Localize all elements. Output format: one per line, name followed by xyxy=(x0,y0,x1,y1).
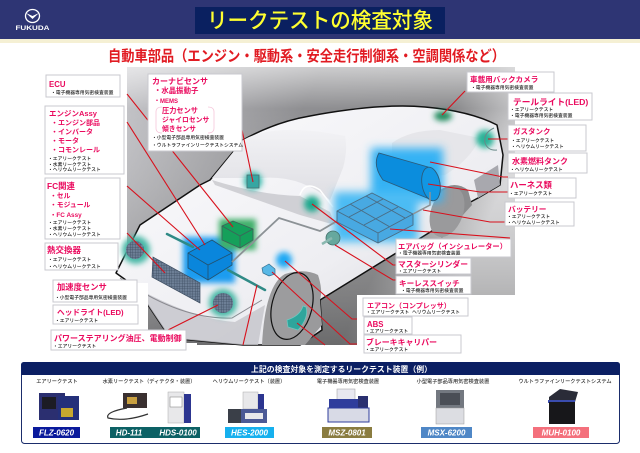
label: ハーネス類: ・エアリークテスト xyxy=(509,190,552,197)
label: 加速度センサ xyxy=(53,280,137,302)
label: エンジンAssy: ・ヘリウムリークテスト xyxy=(48,166,101,173)
device: FLZ-0620: FLZ-0620 xyxy=(39,428,75,438)
label: ガスタンク: ・エアリークテスト xyxy=(511,137,554,144)
icon: keyless switch xyxy=(322,231,340,245)
label: カーナビセンサ: ・水晶振動子 xyxy=(154,86,199,95)
label: カーナビセンサ: カーナビセンサ xyxy=(152,76,208,86)
side window xyxy=(392,130,480,180)
label: カーナビセンサ: 圧力センサ xyxy=(162,106,198,115)
label: マスターシリンダー: マスターシリンダー xyxy=(398,259,468,269)
white backing for lower labels xyxy=(357,295,517,355)
header band xyxy=(0,0,640,43)
front bumper shade xyxy=(116,275,265,345)
label: ブレーキキャリパー: ・エアリークテスト xyxy=(365,346,408,353)
label: エアコン: ・エアリークテスト xyxy=(366,308,409,316)
device: HD-111 / HDS-0100: HDS-0100 xyxy=(159,428,197,438)
label: 車載用バックカメラ xyxy=(467,72,554,92)
device: MUH-0100: ウルトラファインリークテストシステム xyxy=(518,377,612,385)
label: 車載用バックカメラ: 車載用バックカメラ xyxy=(470,74,538,84)
device: MSX-6200: 小型電子部品専用気密検査装置 xyxy=(417,377,489,385)
label: マスターシリンダー: ・エアリークテスト xyxy=(398,268,441,274)
device: MSX-6200: MSX-6200 xyxy=(428,428,466,438)
label: 熱交換器: ・エアリークテスト xyxy=(48,256,91,263)
label: カーナビセンサ: ・小型電子部品専用気密検査装置 xyxy=(152,134,224,141)
label: FC関連: FC関連 xyxy=(47,181,76,191)
label: エアバッグ: ・電子機器専用気密検査装置 xyxy=(398,250,461,256)
label: 加速度センサ: 加速度センサ xyxy=(57,282,107,292)
white backing left of car xyxy=(127,283,148,345)
label: エアバッグ: エアバッグ（インシュレーター） xyxy=(398,242,507,251)
label: エアバッグ xyxy=(396,239,511,257)
label: カーナビセンサ: ・MEMS xyxy=(154,99,178,105)
label: FC関連: ・モジュール xyxy=(50,201,91,209)
windshield xyxy=(212,130,346,200)
label: エンジンAssy xyxy=(45,106,124,174)
car body xyxy=(116,106,503,345)
rear quarter xyxy=(474,165,500,198)
label: バッテリー: ・ヘリウムリークテスト xyxy=(507,219,560,226)
label: FC関連 xyxy=(45,178,120,239)
label: 加速度センサ: ・小型電子部品専用気密検査装置 xyxy=(55,294,127,301)
label: エンジンAssy: ・インバータ xyxy=(51,127,93,136)
label: エンジンAssy: ・モータ xyxy=(51,136,79,145)
icon: ECU green box xyxy=(222,221,253,248)
logo: FUKUDA: FUKUDA xyxy=(16,26,50,32)
label: キーレススイッチ xyxy=(396,276,471,294)
label: 水素燃料タンク xyxy=(508,153,587,173)
front wheel arch xyxy=(262,271,322,345)
device: MSX-6200 xyxy=(417,377,489,438)
device: FLZ-0620: エアリークテスト xyxy=(36,377,78,385)
label: ABS xyxy=(364,317,412,334)
label: テールライト: ・エアリークテスト xyxy=(510,106,553,113)
label: ガスタンク xyxy=(508,125,586,151)
component glows xyxy=(122,111,494,317)
label: パワーステアリング xyxy=(51,330,186,350)
door seam xyxy=(300,186,333,207)
label: ブレーキキャリパー: ブレーキキャリパー xyxy=(366,337,437,347)
label: エンジンAssy: ・コモンレール xyxy=(51,146,100,154)
pipe xyxy=(232,218,337,262)
car illustration background xyxy=(127,67,515,345)
device: MSZ-0801: 電子機器専用気密検査装置 xyxy=(317,377,379,385)
label: エアコン xyxy=(363,298,468,316)
label: バッテリー: ・エアリークテスト xyxy=(507,213,550,220)
label: FC関連: ・セル xyxy=(50,192,71,200)
label: ECU: ・電子機器専用気密検査装置 xyxy=(51,89,114,96)
label: エアコン: ヘリウムリークテスト xyxy=(412,308,460,316)
device: MSZ-0801 xyxy=(317,377,379,438)
label: エンジンAssy: ・エンジン部品 xyxy=(51,118,100,127)
icon: fuel tank xyxy=(376,153,443,214)
label: ヘッドライト xyxy=(53,305,138,324)
label: 熱交換器 xyxy=(45,243,118,270)
device: MUH-0100 xyxy=(518,377,612,438)
label: ヘッドライト: ・エアリークテスト xyxy=(55,317,98,324)
icon: heat exchanger xyxy=(152,257,200,303)
label: 熱交換器: ・ヘリウムリークテスト xyxy=(48,263,101,270)
label: エンジンAssy: ・水素リークテスト xyxy=(48,161,91,168)
label: カーナビセンサ: ・ウルトラファインリークテストシステム xyxy=(152,142,243,148)
device: HES-2000: HES-2000 xyxy=(231,428,268,438)
label: キーレススイッチ: ・電子機器専用気密検査装置 xyxy=(401,287,464,294)
hood shadow xyxy=(212,180,335,225)
device: HES-2000 xyxy=(213,377,285,438)
label: 熱交換器: 熱交換器 xyxy=(47,245,82,255)
leader lines xyxy=(127,91,510,345)
label: カーナビセンサ xyxy=(148,74,243,151)
icon: radiator fan xyxy=(126,241,144,259)
device: MSZ-0801: MSZ-0801 xyxy=(328,428,366,438)
label: キーレススイッチ: キーレススイッチ xyxy=(399,279,460,288)
title: リークテストの検査対象 xyxy=(207,9,433,33)
icon: navigation sensor xyxy=(247,175,259,188)
panel: leak test equipment xyxy=(21,362,620,444)
icon: engine box xyxy=(188,240,232,280)
icon: headlight xyxy=(213,293,233,313)
rear wheel xyxy=(423,182,471,242)
device: MUH-0100: MUH-0100 xyxy=(542,428,581,438)
logo: FUKUDA xyxy=(16,10,50,32)
label: FC関連: ・水素リークテスト xyxy=(48,225,91,232)
label: テールライト: ・電子機器専用気密検査装置 xyxy=(510,112,573,119)
label: ハーネス類 xyxy=(508,178,576,198)
label: ガスタンク: ガスタンク xyxy=(513,126,550,136)
icon: air conditioning box xyxy=(262,264,275,276)
label: FC関連: ・ヘリウムリークテスト xyxy=(48,231,101,238)
label: パワーステアリング: パワーステアリング油圧、電動制御 xyxy=(54,333,182,343)
label: マスターシリンダー xyxy=(396,258,471,274)
label: バッテリー xyxy=(505,202,574,226)
icon: brake caliper xyxy=(287,306,307,330)
label: カーナビセンサ: ジャイロセンサ xyxy=(162,116,209,124)
label: ABS: ABS xyxy=(367,320,383,329)
label: 水素燃料タンク: 水素燃料タンク xyxy=(512,156,568,166)
label: 水素燃料タンク: ・ヘリウムリークテスト xyxy=(510,166,563,173)
label: ECU: ECU xyxy=(49,80,66,89)
label: テールライト xyxy=(508,93,592,120)
label: エンジンAssy: エンジンAssy xyxy=(49,109,98,118)
front wheel xyxy=(264,268,320,344)
device: FLZ-0620 xyxy=(33,377,80,438)
label: パワーステアリング: ・エアリークテスト xyxy=(53,342,96,350)
icon: gas cap xyxy=(485,128,497,150)
label: ハーネス類: ハーネス類 xyxy=(510,180,552,190)
label: エンジンAssy: ・エアリークテスト xyxy=(48,155,91,162)
device: HD-111 / HDS-0100: HD-111 xyxy=(116,428,143,438)
label: 車載用バックカメラ: ・電子機器専用気密検査装置 xyxy=(471,84,534,91)
label: ECU xyxy=(46,75,120,97)
subtitle: 自動車部品（エンジン・駆動系・安全走行制御系・空調関係など） xyxy=(108,47,505,65)
label: ABS: ・エアリークテスト xyxy=(365,328,408,334)
device: HES-2000: ヘリウムリークテスト（装置） xyxy=(213,377,285,385)
panel heading xyxy=(21,362,620,375)
label: バッテリー: バッテリー xyxy=(508,205,546,214)
label: FC関連: ・FC Assy xyxy=(50,212,82,219)
label: ガスタンク: ・ヘリウムリークテスト xyxy=(511,143,564,150)
label: ブレーキキャリパー xyxy=(364,335,461,353)
label: エアコン: エアコン（コンプレッサ） xyxy=(367,302,451,310)
icon: battery xyxy=(337,193,413,243)
label: FC関連: ・エアリークテスト xyxy=(48,219,91,226)
label: カーナビセンサ: 傾きセンサ xyxy=(162,124,196,133)
device: HD-111 / HDS-0100: 水素リークテスト（ディテクタ・装置） xyxy=(103,377,195,385)
label: ヘッドライト: ヘッドライト(LED) xyxy=(57,308,124,317)
device: HD-111 / HDS-0100 xyxy=(103,377,200,438)
icon: shaft xyxy=(167,234,265,290)
panel heading: 上記の検査対象を測定するリークテスト装置（例） xyxy=(251,364,432,374)
label: テールライト: テールライト(LED) xyxy=(513,97,588,107)
